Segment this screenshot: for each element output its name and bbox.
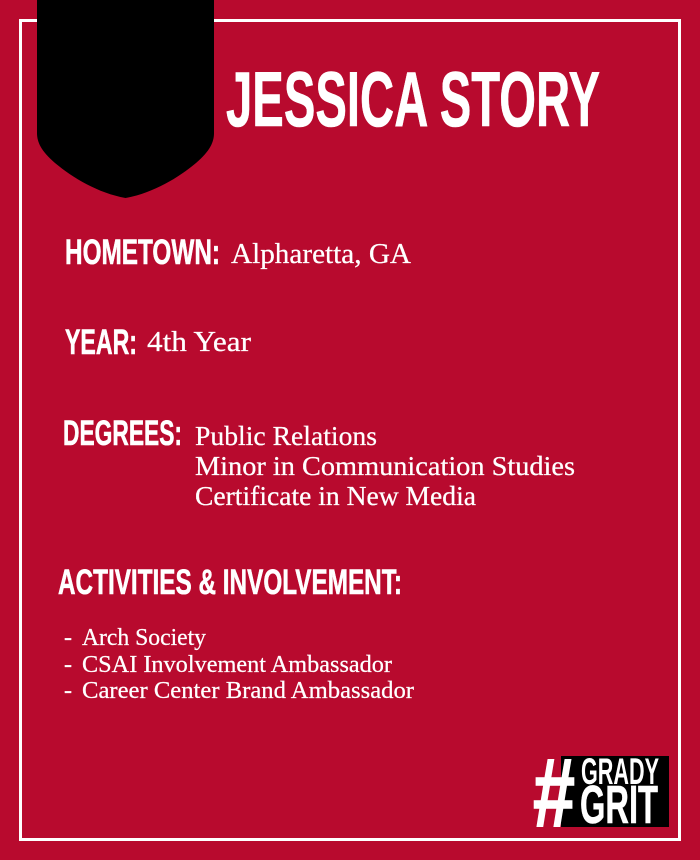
year row <box>65 323 251 362</box>
degrees row <box>63 414 575 511</box>
activities list: - <box>64 652 72 678</box>
degrees list: Minor in Communication Studies <box>195 451 575 481</box>
activities list: - <box>64 678 72 704</box>
activities list: - <box>64 625 72 651</box>
degrees label: DEGREES: <box>63 414 182 453</box>
hometown row <box>65 233 411 272</box>
hometown value: Alpharetta, GA <box>231 238 411 270</box>
hometown label: HOMETOWN: <box>65 233 220 272</box>
activities list: Arch Society <box>82 625 206 651</box>
activities list <box>64 625 414 704</box>
year value: 4th Year <box>147 326 251 358</box>
activities list: Career Center Brand Ambassador <box>82 678 414 704</box>
activities heading: ACTIVITIES & INVOLVEMENT: <box>58 563 402 602</box>
degrees list <box>195 421 575 511</box>
icon: black shield banner <box>37 0 214 198</box>
degrees list: Certificate in New Media <box>195 481 476 511</box>
logo: #GRADY GRIT <box>533 738 669 847</box>
logo: #GRADY GRIT: # <box>533 738 575 847</box>
year label: YEAR: <box>65 323 137 362</box>
activities list: CSAI Involvement Ambassador <box>82 652 392 678</box>
degrees list: Public Relations <box>195 421 377 451</box>
